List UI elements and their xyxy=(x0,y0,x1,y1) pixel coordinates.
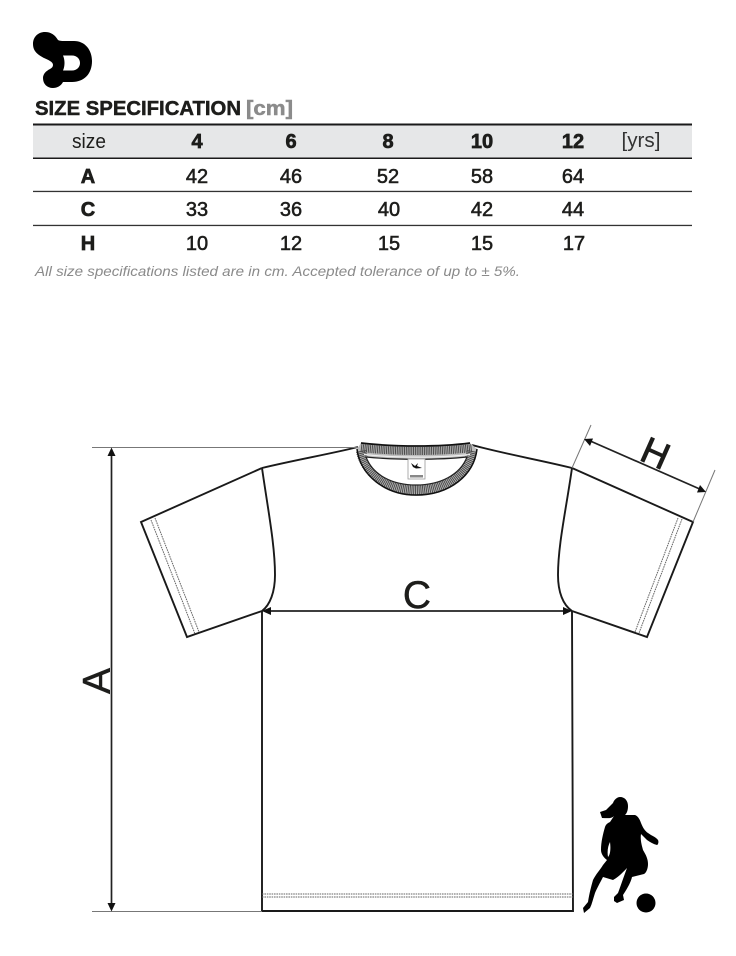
table header row: [yrs] xyxy=(622,130,660,152)
row H: H xyxy=(81,233,95,255)
row A: 58 xyxy=(471,166,493,188)
row A: 46 xyxy=(280,166,302,188)
row C: 42 xyxy=(471,199,493,221)
row H xyxy=(81,233,585,255)
tolerance note: All size specifications listed are in cm. Accepted tolerance of up to ± 5%. xyxy=(34,263,520,279)
table header row: size xyxy=(72,131,106,153)
row C: C xyxy=(81,199,95,221)
row A: A xyxy=(81,166,95,188)
table header row xyxy=(33,125,692,158)
row H: 15 xyxy=(471,233,493,255)
row A xyxy=(81,166,584,188)
size table xyxy=(33,124,692,255)
icon: brand logo xyxy=(33,32,92,88)
row C: 33 xyxy=(186,199,208,221)
dimension A xyxy=(76,448,358,912)
neck label with bird mark xyxy=(408,459,425,479)
t-shirt technical drawing xyxy=(141,443,693,911)
row A: 52 xyxy=(377,166,399,188)
row C: 44 xyxy=(562,199,584,221)
shirt body xyxy=(262,445,573,911)
row H: 12 xyxy=(280,233,302,255)
icon: footballer silhouette xyxy=(583,797,658,913)
dimension C: C xyxy=(403,574,431,617)
right sleeve xyxy=(558,468,693,637)
table header row: 12 xyxy=(562,131,584,153)
heading: [cm] xyxy=(246,97,293,120)
heading: SIZE SPECIFICATION xyxy=(35,97,241,120)
ribbed collar xyxy=(357,443,477,496)
dimension C xyxy=(262,574,572,617)
table header row: 6 xyxy=(285,131,297,153)
dimension A: A xyxy=(76,668,119,694)
row H: 10 xyxy=(186,233,208,255)
row C xyxy=(81,199,584,221)
left sleeve xyxy=(141,468,275,637)
dimension H xyxy=(572,425,715,522)
row A: 42 xyxy=(186,166,208,188)
table header row: 10 xyxy=(471,131,493,153)
table rules xyxy=(33,124,692,226)
table header row: 4 xyxy=(191,131,203,153)
row H: 17 xyxy=(563,233,585,255)
row A: 64 xyxy=(562,166,584,188)
row H: 15 xyxy=(378,233,400,255)
table header row: 8 xyxy=(382,131,394,153)
row C: 36 xyxy=(280,199,302,221)
dimension H: H xyxy=(635,429,676,478)
row C: 40 xyxy=(378,199,400,221)
